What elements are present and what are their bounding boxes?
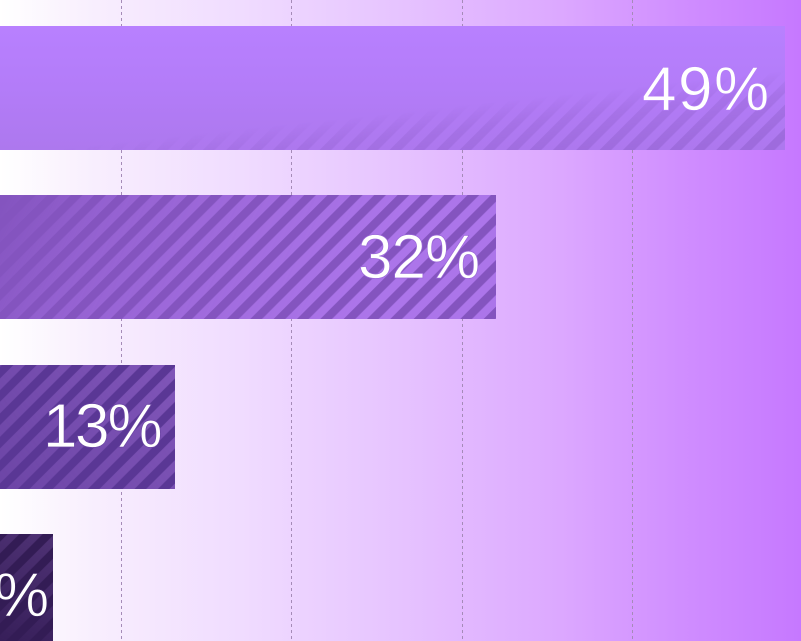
- vertical dashed grid lines: [122, 0, 632, 641]
- bar: cropped value: [0, 534, 53, 641]
- bar: 32%: [0, 195, 496, 319]
- value: 32%: 32%: [358, 223, 480, 292]
- bar: 13%: [0, 365, 175, 489]
- bar: 49%: [0, 26, 785, 150]
- value: 49%: 49%: [642, 55, 769, 124]
- value: 13%: 13%: [43, 392, 163, 461]
